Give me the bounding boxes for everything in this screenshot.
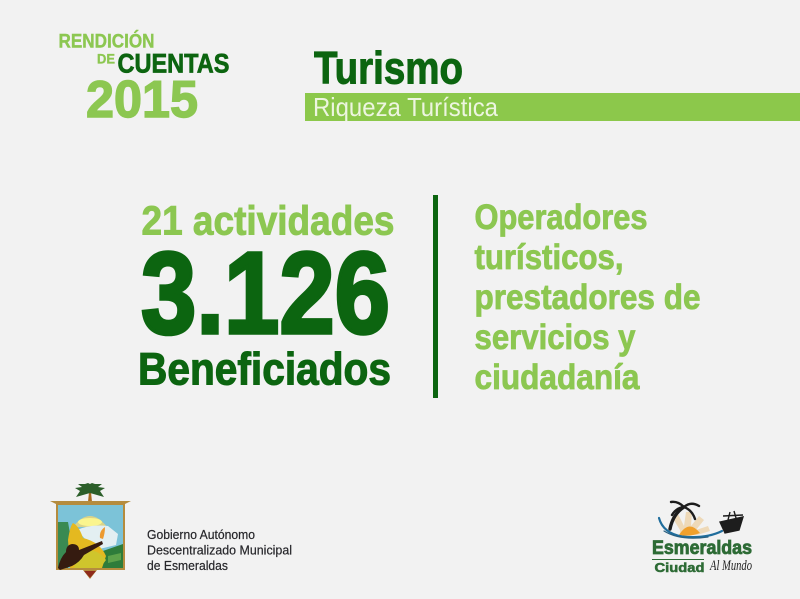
vertical divider (433, 195, 438, 398)
icon: sun rays (672, 512, 710, 536)
torch flame (100, 527, 105, 539)
stat: 21 actividades: 21 actividades (142, 198, 394, 244)
text block: audience: ciudadanía (474, 358, 640, 397)
text block: audience: prestadores de (474, 278, 700, 317)
stat: 3.126: 3.126 (141, 228, 390, 358)
text block: audience: Operadores (474, 198, 648, 237)
text block: Gobierno Autónomo Descentralizado Municipal de Esmeraldas: Gobierno Autónomo (147, 527, 255, 542)
logo: Esmeraldas Ciudad Al Mundo: Al Mundo (709, 558, 752, 574)
text block: Gobierno Autónomo Descentralizado Municipal de Esmeraldas: de Esmeraldas (147, 558, 228, 573)
logo: Rendición de Cuentas 2015: CUENTAS (118, 48, 230, 78)
text block: Gobierno Autónomo Descentralizado Municipal de Esmeraldas: Descentralizado Municipal (147, 542, 292, 558)
white mountain (77, 526, 118, 550)
subtitle bar: Riqueza Turística: Riqueza Turística (313, 92, 498, 122)
yellow hills (68, 523, 106, 568)
shield (56, 503, 125, 579)
palm tree crest (75, 483, 105, 510)
logo wordmark: Esmeraldas (652, 538, 752, 559)
icon: municipal coat of arms (50, 483, 131, 579)
text block: audience (474, 198, 700, 397)
shield top bar (50, 501, 131, 504)
text block: audience: turísticos, (474, 238, 624, 277)
sun and arch (73, 516, 107, 527)
shield sky (58, 505, 123, 568)
logo: Rendición de Cuentas 2015: DE (97, 50, 115, 66)
logo: Esmeraldas Ciudad Al Mundo: Ciudad (654, 560, 705, 575)
subtitle bar: Riqueza Turística (305, 92, 800, 122)
green side foliage (58, 522, 72, 568)
stat label: Beneficiados: Beneficiados (138, 344, 391, 394)
shield base point (84, 571, 96, 578)
logo: Rendición de Cuentas 2015: RENDICIÓN (58, 28, 154, 52)
dark figure (58, 541, 103, 570)
logo: Rendición de Cuentas 2015: 2015 (86, 71, 198, 129)
heading: Turismo: Turismo (314, 42, 463, 94)
icon: waves (659, 518, 722, 538)
logo: Rendición de Cuentas 2015 (58, 28, 230, 129)
logo: Esmeraldas Ciudad Al Mundo (652, 502, 752, 575)
text block: Gobierno Autónomo Descentralizado Municipal de Esmeraldas (147, 527, 292, 573)
text block: audience: servicios y (474, 318, 636, 357)
icon: boat (720, 511, 743, 533)
icon: palm tree (670, 502, 699, 529)
